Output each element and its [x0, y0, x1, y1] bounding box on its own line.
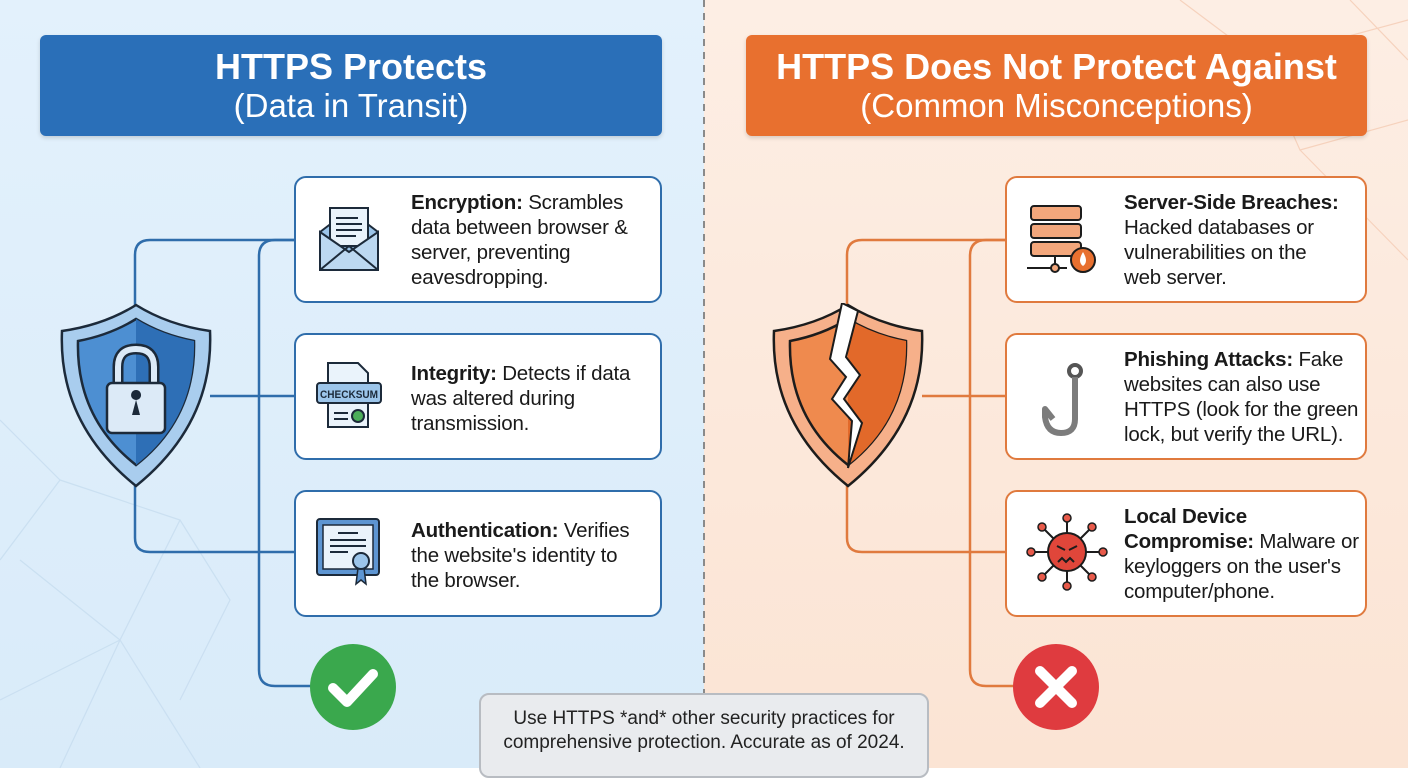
- header: HTTPS Does Not Protect Against: HTTPS Does Not Protect Against: [776, 46, 1337, 87]
- icon: checksum document: CHECKSUM: [320, 389, 378, 401]
- icon: broken orange shield: [772, 303, 924, 488]
- text: Server-Side Breaches: [1124, 191, 1339, 289]
- text: Server-Side Breaches: web server.: [1124, 266, 1227, 289]
- text: Phishing Attacks: Phishing Attacks: Fake: [1124, 348, 1343, 371]
- text: Encryption: server, preventing: [411, 241, 570, 264]
- text: Phishing Attacks: lock, but verify the URL).: [1124, 423, 1343, 446]
- text: Server-Side Breaches: Server-Side Breaches:: [1124, 191, 1339, 214]
- text: Encryption: data between browser &: [411, 216, 628, 239]
- card: Integrity: [294, 333, 662, 460]
- header: HTTPS Does Not Protect Against: (Common Misconceptions): [860, 87, 1253, 124]
- icon: certificate: [316, 518, 380, 586]
- text: Integrity: was altered during: [411, 387, 575, 410]
- text: Authentication: the website's identity to: [411, 544, 617, 567]
- icon: fishing hook: [1042, 363, 1083, 436]
- header: HTTPS Protects: HTTPS Protects: [215, 46, 487, 87]
- card: Encryption: [294, 176, 662, 303]
- text: Authentication: [411, 519, 629, 592]
- text: Server-Side Breaches: Hacked databases or: [1124, 216, 1314, 239]
- icon: green check: [310, 644, 396, 730]
- text: Phishing Attacks: HTTPS (look for the green: [1124, 398, 1358, 421]
- text: Phishing Attacks: websites can also use: [1124, 373, 1320, 396]
- footer note: [479, 693, 929, 778]
- icon: red X: [1013, 644, 1099, 730]
- text: Encryption: Encryption: Scrambles: [411, 191, 623, 214]
- card: Phishing Attacks: [1005, 333, 1367, 460]
- text: Integrity: Integrity: Detects if data: [411, 362, 630, 385]
- card: Authentication: [294, 490, 662, 617]
- text: Encryption: [411, 191, 628, 289]
- icon: envelope: [319, 207, 379, 271]
- text: Server-Side Breaches: vulnerabilities on the: [1124, 241, 1306, 264]
- icon: checksum document: [316, 362, 382, 428]
- header: HTTPS Does Not Protect Against: [746, 35, 1367, 136]
- text: Local Device Compromise: [1124, 505, 1359, 603]
- footer note: Use HTTPS *and* other security practices for: [513, 708, 895, 729]
- footer note: comprehensive protection. Accurate as of 2024.: [503, 732, 905, 753]
- icon: blue shield with lock: [60, 304, 212, 488]
- text: Phishing Attacks: [1124, 348, 1358, 446]
- text: Local Device Compromise: Local Device: [1124, 505, 1247, 528]
- text: Encryption: eavesdropping.: [411, 266, 548, 289]
- header: HTTPS Protects: (Data in Transit): [234, 87, 468, 124]
- icon: malware virus: [1026, 513, 1108, 591]
- card: Server-Side Breaches: [1005, 176, 1367, 303]
- text: Authentication: Authentication: Verifies: [411, 519, 629, 542]
- text: Local Device Compromise: computer/phone.: [1124, 580, 1275, 603]
- text: Authentication: the browser.: [411, 569, 520, 592]
- text: Integrity: [411, 362, 630, 435]
- header: HTTPS Protects: [40, 35, 662, 136]
- text: Local Device Compromise: keyloggers on the user's: [1124, 555, 1341, 578]
- icon: server with flame: [1027, 205, 1096, 273]
- text: Integrity: transmission.: [411, 412, 529, 435]
- card: Local Device Compromise: [1005, 490, 1367, 617]
- text: Local Device Compromise: Compromise: Malware or: [1124, 530, 1359, 553]
